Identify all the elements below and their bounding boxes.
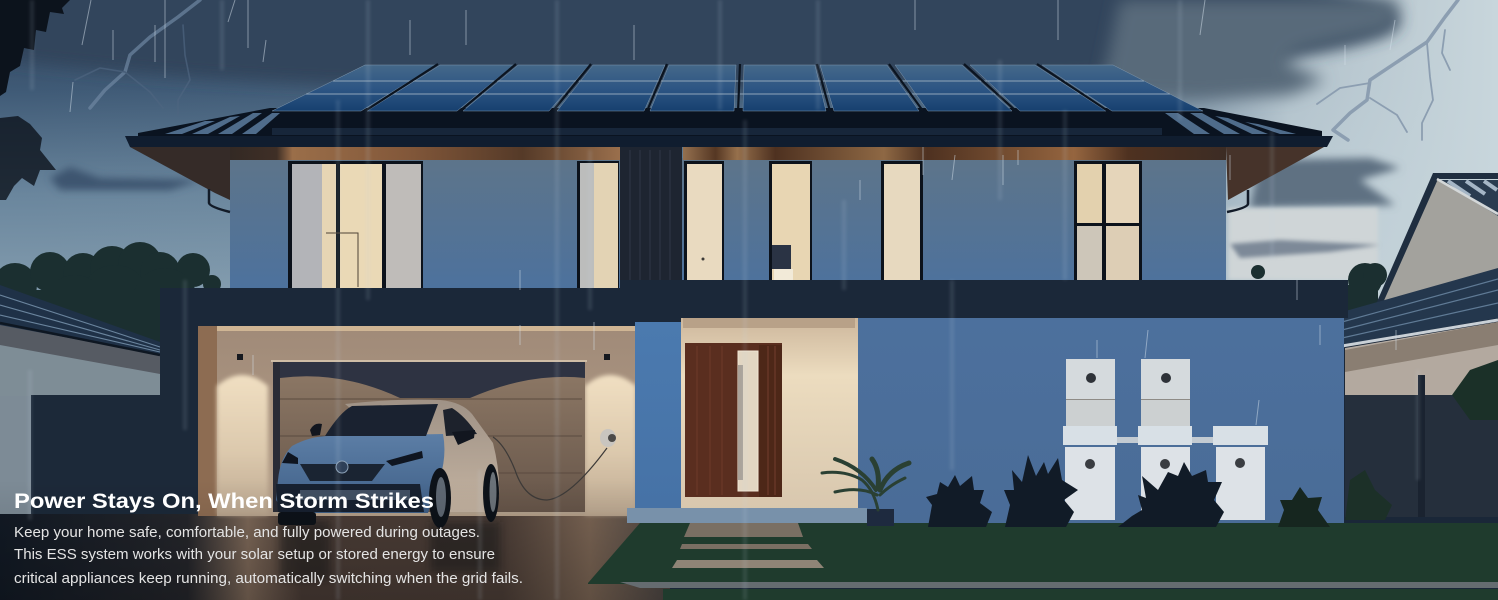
upper windows: [288, 161, 1142, 288]
body copy: [14, 525, 523, 587]
window: large triple left: [288, 161, 423, 288]
window: four pane right: [1074, 161, 1142, 280]
upper storey wall: [230, 158, 1226, 288]
front door: [685, 343, 782, 497]
driveway: [0, 514, 670, 600]
battery tower three: [1213, 426, 1268, 520]
connectors: [1117, 437, 1213, 443]
stepping stones: [672, 523, 824, 568]
wall lamps: [237, 354, 610, 360]
grille: [300, 464, 385, 481]
solar panels: [272, 65, 1203, 111]
wheels: [429, 468, 451, 528]
mirrors: [310, 424, 475, 445]
window: centre two: [769, 161, 812, 280]
fine rain streaks: [70, 0, 1396, 425]
lightning bolt: right: [1317, 0, 1458, 140]
panel gaps: [365, 64, 1108, 112]
window: narrow left: [577, 161, 619, 288]
neighbouring house: right: [1342, 173, 1498, 517]
lightning bolt: left: [75, 0, 200, 115]
side windows: [443, 408, 477, 436]
EV charger and cable: [493, 429, 616, 500]
downspouts: [209, 189, 1248, 212]
battery tower one: [1063, 359, 1117, 520]
body line 2: This ESS system works with your solar setup or stored energy to ensure: [14, 547, 495, 563]
metal hip: left: [165, 113, 280, 134]
eave: [125, 136, 1333, 147]
car front body: [276, 434, 444, 513]
roof dark underlay: [138, 108, 1322, 137]
windshield: [325, 404, 438, 436]
entry step: [627, 508, 867, 523]
panel row lines: [306, 81, 1170, 94]
left fence and pillar: [31, 330, 198, 520]
text legibility shade: [0, 480, 670, 600]
dark garden shrubs: [926, 455, 1392, 527]
lit soffit strips: [230, 147, 620, 160]
electric car: [276, 400, 499, 528]
soffit: left: [130, 147, 230, 200]
horizontal dark band: [160, 280, 1348, 396]
heading: Power Stays On, When Storm Strikes: [14, 489, 434, 513]
window: centre one: [684, 161, 724, 280]
lower bumper: [276, 484, 424, 512]
soffit: right: [1226, 147, 1324, 200]
garage: [198, 326, 636, 516]
roof with solar array: [125, 64, 1333, 212]
central vertical cladding: [620, 147, 682, 287]
neighbouring house: left: [0, 285, 160, 516]
stormy sky background: [0, 0, 1498, 300]
battery tower two: [1138, 359, 1192, 520]
body line 3: critical appliances keep running, automatically switching when the grid fails.: [14, 571, 523, 587]
tree branches: top left: [0, 0, 70, 200]
pillar: [635, 322, 681, 508]
lawn: [588, 523, 1498, 584]
window: centre three: [881, 161, 923, 280]
wall light glow: right: [585, 375, 636, 515]
body line 1: Keep your home safe, comfortable, and fully powered during outages.: [14, 525, 480, 541]
garage door: [271, 360, 587, 514]
metal hip: right: [1165, 113, 1296, 134]
battery storage system: [1063, 359, 1268, 520]
sidewalk and front grass: [620, 582, 1498, 600]
wall light glow: left: [217, 375, 268, 515]
lower right wall: [858, 318, 1344, 526]
headlights: [282, 451, 423, 466]
background tree line: [0, 242, 1387, 345]
potted plant: [822, 459, 909, 526]
car side body: [345, 400, 499, 512]
entry porch: [635, 318, 858, 510]
